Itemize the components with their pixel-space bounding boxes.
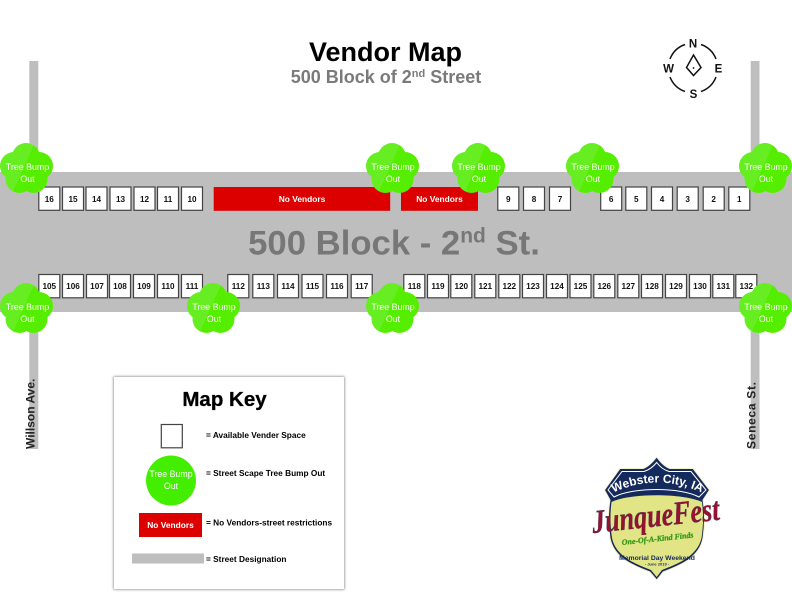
icon: compass xyxy=(663,38,723,101)
vendor spaces: south side: 123 xyxy=(526,282,540,291)
tree bump out: south 1 xyxy=(0,283,53,333)
label: Willson Ave.: Willson Ave. xyxy=(24,379,38,449)
tree bump out: north 5 xyxy=(739,143,792,193)
logo tagline: One-Of-A-Kind Finds xyxy=(621,531,694,547)
vendor spaces: south side: 128 xyxy=(645,282,659,291)
vendor spaces: south side: 115 xyxy=(306,282,320,291)
vendor spaces: north side: 8 xyxy=(532,195,537,204)
street: Seneca St cross street xyxy=(751,61,760,449)
tree bump out: south 4: Tree Bump xyxy=(744,302,788,312)
vendor spaces: north side: 14 xyxy=(92,195,101,204)
tree bump out: north 1: Tree Bump xyxy=(6,162,49,172)
tree bump out: north 3 xyxy=(452,143,505,193)
vendor spaces: north side xyxy=(39,187,750,210)
vendor spaces: south side: 106 xyxy=(66,282,80,291)
vendor spaces: south side: 124 xyxy=(550,282,564,291)
key: tree bump out xyxy=(146,456,325,506)
subtitle: Street xyxy=(425,67,481,87)
tree bump out: north 2: Tree Bump xyxy=(371,162,415,172)
logo: JunqueFest shield xyxy=(589,456,722,581)
vendor spaces: south side: 132 xyxy=(739,282,754,291)
vendor spaces: south side: 127 xyxy=(621,282,636,291)
logo small print: - June 2019 - xyxy=(645,562,670,566)
street: Willson Ave cross street xyxy=(29,61,38,449)
key: tree bump out: = Street Scape Tree Bump Out xyxy=(206,468,325,478)
vendor spaces: north side: 3 xyxy=(685,195,690,204)
vendor spaces: south side: 130 xyxy=(693,282,707,291)
banner text: Webster City, IA xyxy=(610,474,702,492)
key: no vendors xyxy=(139,513,332,537)
vendor spaces: south side: 129 xyxy=(669,282,683,291)
key: street designation: = Street Designation xyxy=(206,554,286,564)
logo wordmark: JunqueFest xyxy=(589,492,722,541)
vendor spaces: north side: 12 xyxy=(140,195,149,204)
key: available vendor space: = Available Vender Space xyxy=(206,430,306,440)
tree bump out: north 1 xyxy=(0,143,53,193)
vendor spaces: south side: 121 xyxy=(478,282,493,291)
vendor spaces: south side: 118 xyxy=(408,282,421,291)
key: no vendors: = No Vendors-street restrictions xyxy=(206,518,332,528)
street name: St. xyxy=(486,224,540,262)
street name: 500 Block - 2 xyxy=(248,224,460,262)
vendor spaces: south side: 105 xyxy=(42,282,57,291)
vendor spaces: north side: 16 xyxy=(45,195,54,204)
icon: compass: S xyxy=(690,89,698,101)
key: street designation xyxy=(132,554,286,564)
tree bump out: north 2: Out xyxy=(386,174,401,184)
vendor spaces: south side: 122 xyxy=(502,282,517,291)
logo date: Memorial Day Weekend xyxy=(619,555,695,562)
vendor spaces: north side: 1 xyxy=(737,195,742,204)
tree bump out: south 1: Tree Bump xyxy=(6,302,49,312)
vendor spaces: north side: 15 xyxy=(68,195,78,204)
vendor spaces: south side: 131 xyxy=(716,282,731,291)
tree bump out: north 4: Tree Bump xyxy=(571,162,615,172)
tree bump out: south 3: Out xyxy=(386,314,401,324)
key: tree bump out: Out xyxy=(164,481,179,491)
tree bump out: north 3: Out xyxy=(472,174,487,184)
label: Seneca St.: Seneca St. xyxy=(744,381,758,449)
vendor spaces: south side: 119 xyxy=(431,282,445,291)
tree bump out: south 2 xyxy=(187,283,240,333)
panel: map key xyxy=(114,376,344,590)
title: Vendor Map xyxy=(309,37,462,67)
no vendors zone: west xyxy=(214,187,390,211)
tree bump out: south 3 xyxy=(366,283,419,333)
vendor spaces: north side: 4 xyxy=(660,195,665,204)
tree bump out: south 2: Tree Bump xyxy=(192,302,236,312)
vendor spaces: north side: 9 xyxy=(506,195,511,204)
vendor spaces: south side: 117 xyxy=(355,282,369,291)
icon: compass: W xyxy=(663,64,674,76)
tree bump out: south 1: Out xyxy=(20,314,35,324)
street: 500 block of 2nd St xyxy=(0,172,792,312)
no vendors zone: center xyxy=(401,187,478,211)
shield body xyxy=(604,457,710,580)
vendor spaces: north side: 10 xyxy=(187,195,197,204)
vendor spaces: north side: 13 xyxy=(116,195,125,204)
vendor spaces: south side: 110 xyxy=(161,282,175,291)
icon: compass: E xyxy=(715,64,723,76)
no vendors zone: center: No Vendors xyxy=(416,194,463,204)
vendor spaces: north side: 11 xyxy=(164,195,173,204)
key: available vendor space xyxy=(161,424,306,448)
vendor spaces: south side: 112 xyxy=(232,282,245,291)
vendor spaces: south side: 107 xyxy=(90,282,104,291)
tree bump out: north 5: Out xyxy=(759,174,774,184)
vendor spaces: south side xyxy=(39,274,757,298)
tree bump out: south 3: Tree Bump xyxy=(371,302,415,312)
vendor spaces: south side: 108 xyxy=(113,282,127,291)
vendor spaces: north side: 5 xyxy=(634,195,639,204)
tree bump out: south 4: Out xyxy=(759,314,774,324)
tree bump out: north 3: Tree Bump xyxy=(457,162,501,172)
vendor spaces: south side: 109 xyxy=(137,282,151,291)
vendor spaces: south side: 113 xyxy=(257,282,270,291)
key: tree bump out: Tree Bump xyxy=(149,469,193,479)
subtitle: 500 Block of 2 xyxy=(291,67,412,87)
vendor spaces: south side: 125 xyxy=(574,282,588,291)
street name: nd xyxy=(460,224,486,248)
no vendors zone: west: No Vendors xyxy=(279,194,326,204)
tree bump out: south 4 xyxy=(739,283,792,333)
vendor spaces: south side: 126 xyxy=(597,282,612,291)
tree bump out: north 4 xyxy=(566,143,619,193)
vendor spaces: north side: 7 xyxy=(558,195,563,204)
vendor spaces: south side: 111 xyxy=(186,282,199,291)
subtitle: nd xyxy=(412,68,425,80)
key: no vendors: No Vendors xyxy=(147,520,194,530)
tree bump out: north 4: Out xyxy=(586,174,601,184)
tree bump out: north 2 xyxy=(366,143,419,193)
vendor spaces: south side: 116 xyxy=(330,282,344,291)
vendor spaces: north side: 6 xyxy=(609,195,614,204)
heading: map key: Map Key xyxy=(182,388,267,411)
vendor spaces: south side: 114 xyxy=(281,282,295,291)
tree bump out: north 1: Out xyxy=(20,174,35,184)
vendor spaces: south side: 120 xyxy=(454,282,469,291)
vendor spaces: north side: 2 xyxy=(711,195,716,204)
tree bump out: north 5: Tree Bump xyxy=(744,162,788,172)
icon: compass: N xyxy=(689,38,697,50)
tree bump out: south 2: Out xyxy=(207,314,222,324)
